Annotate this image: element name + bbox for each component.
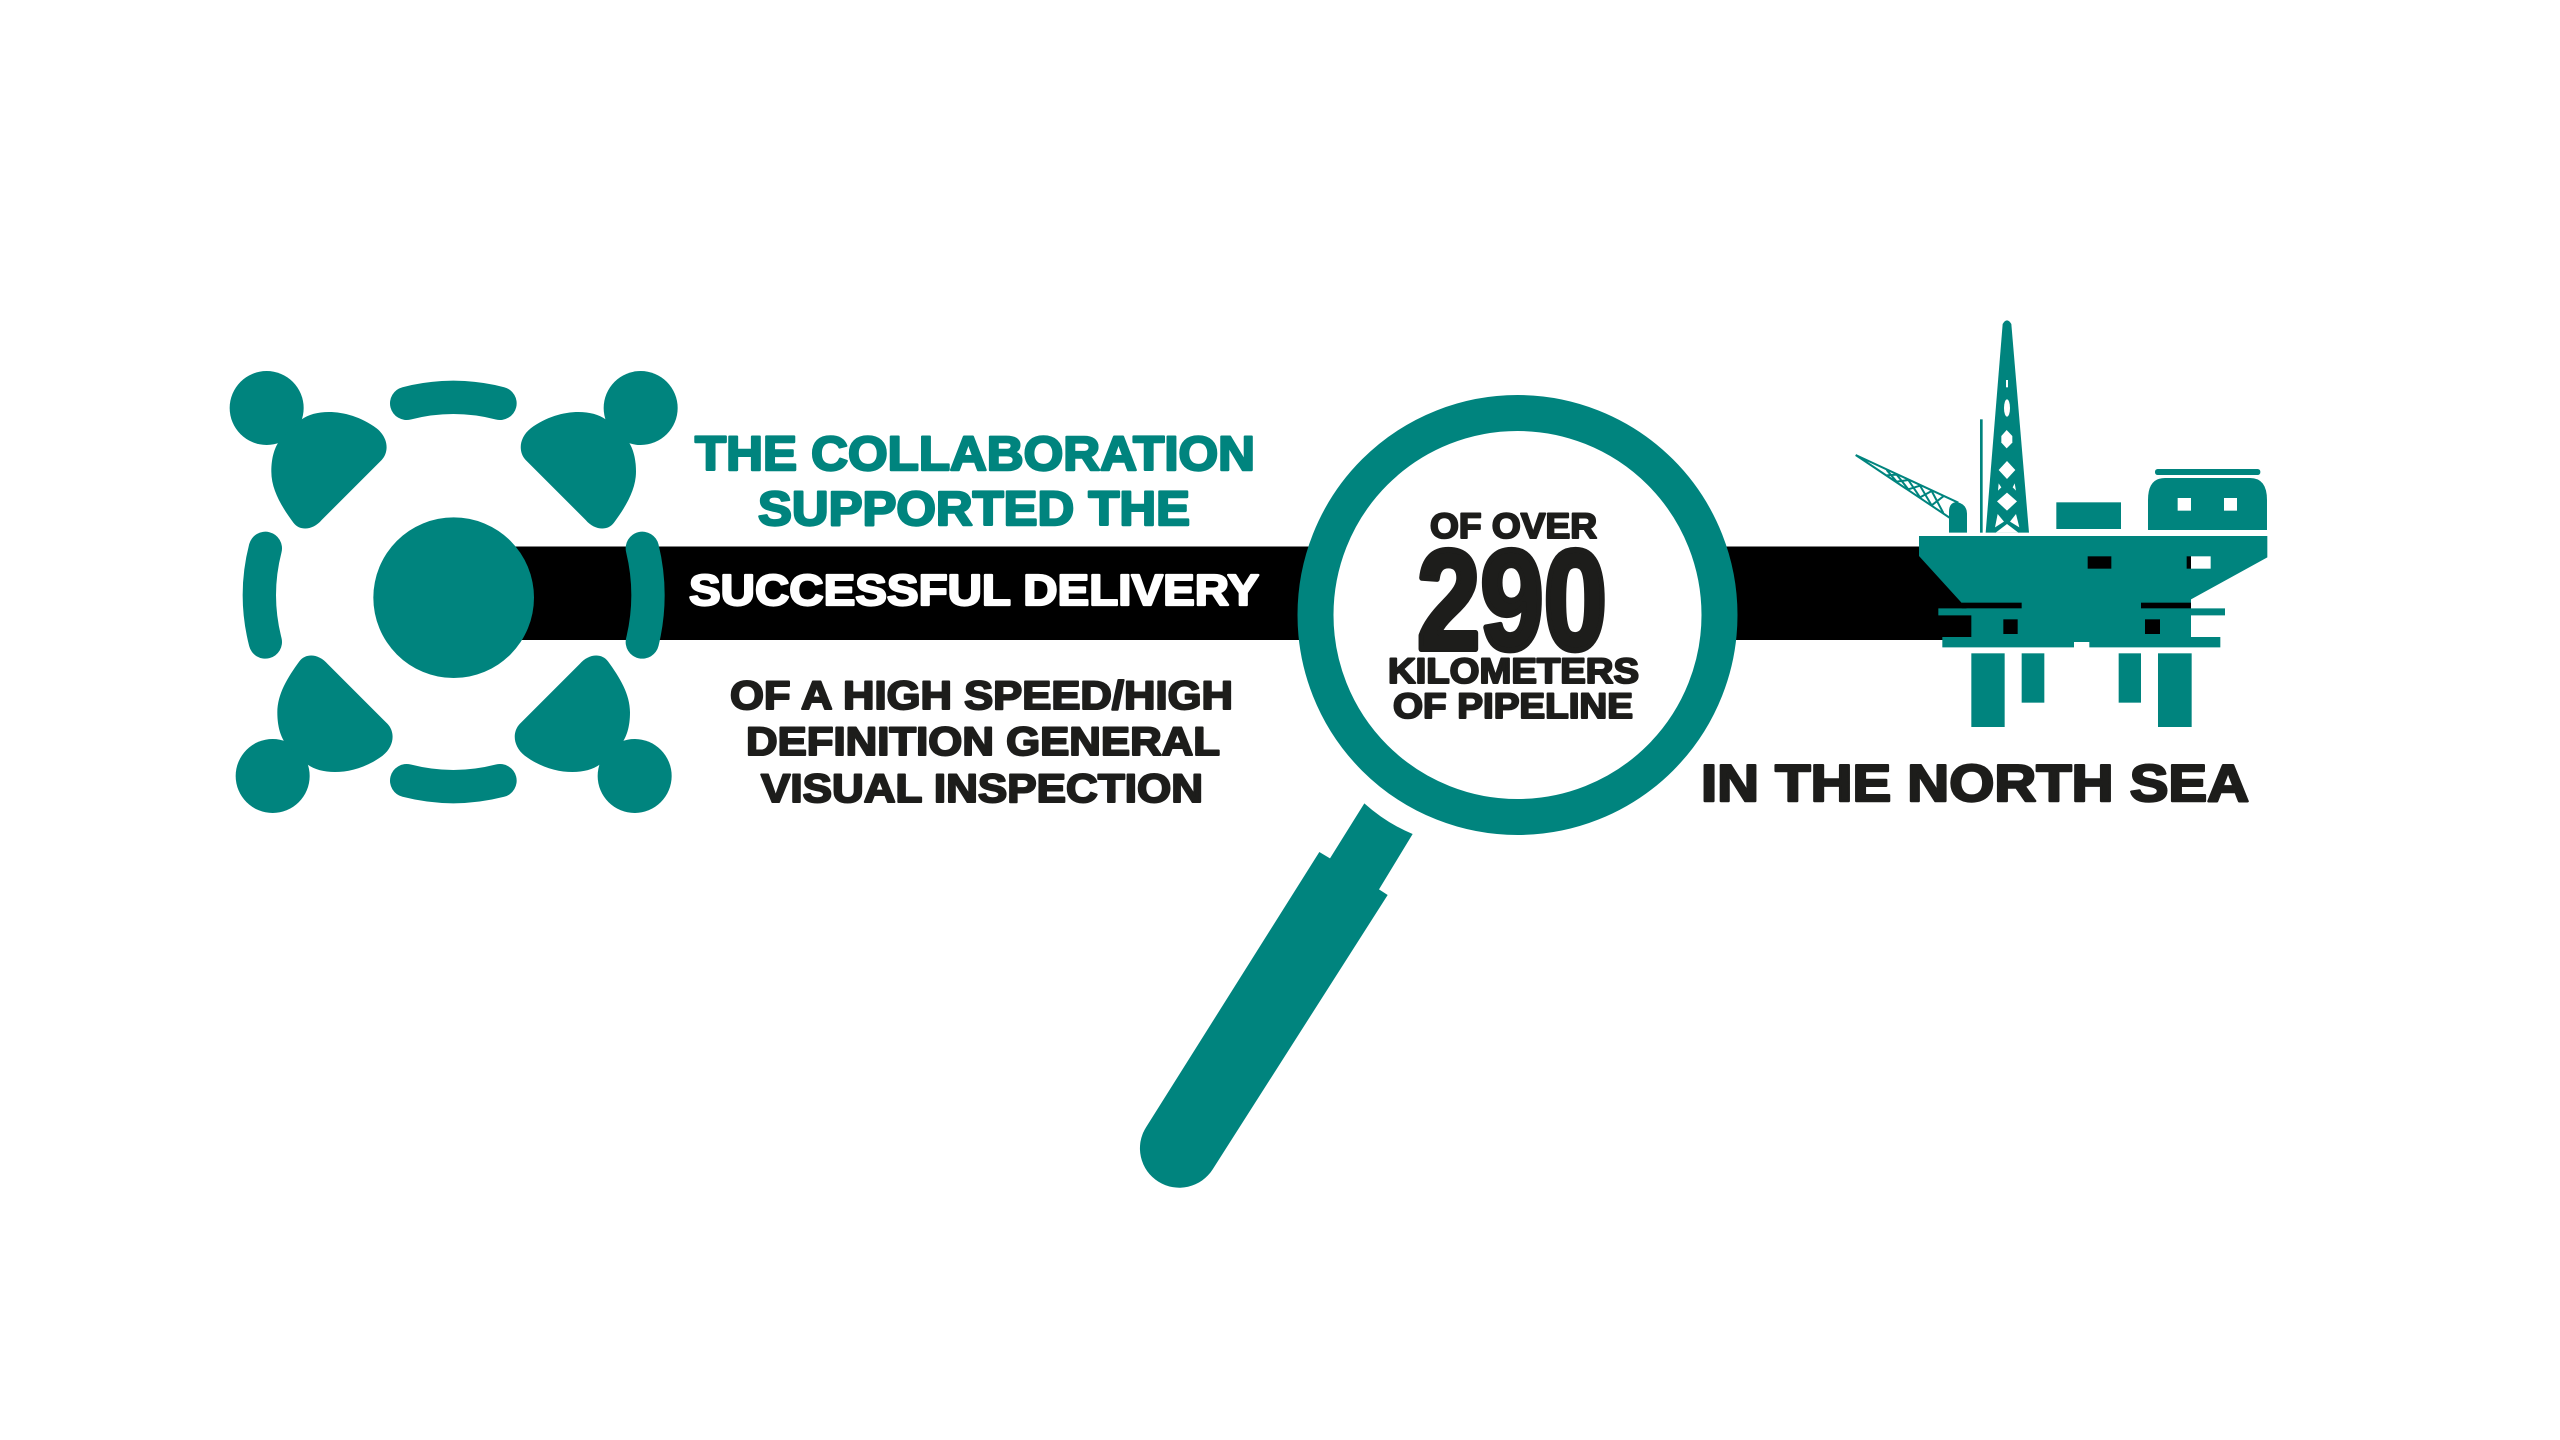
vent pole — [1980, 419, 1983, 533]
person bottom left — [236, 655, 393, 813]
hull openings — [1962, 556, 2211, 634]
icon: people around a table — [230, 371, 678, 813]
callout: 290 kilometers of pipeline — [1388, 507, 1639, 726]
person top left — [230, 371, 387, 529]
heading: the collaboration: SUPPORTED THE — [758, 483, 1190, 536]
text: inspection description — [730, 674, 1233, 811]
icon: magnifying glass — [1140, 413, 1720, 1188]
callout: 290 kilometers of pipeline: OF OVER — [1430, 507, 1597, 546]
callout: 290 kilometers of pipeline: OF PIPELINE — [1393, 687, 1633, 726]
crane — [1856, 455, 1967, 533]
storage block — [2056, 502, 2121, 529]
callout: 290 kilometers of pipeline: KILOMETERS — [1388, 652, 1639, 691]
table — [373, 517, 534, 678]
callout: 290 kilometers of pipeline: 290 — [1417, 521, 1607, 680]
derrick tower — [1986, 320, 2029, 533]
text: successful delivery: SUCCESSFUL DELIVERY — [689, 566, 1259, 615]
person bottom right — [515, 655, 672, 813]
person top right — [521, 371, 678, 529]
icon: offshore oil rig — [1856, 320, 2267, 727]
heading: the collaboration — [695, 428, 1255, 536]
text: in the north sea: IN THE NORTH SEA — [1701, 755, 2249, 813]
text: inspection description: VISUAL INSPECTION — [761, 767, 1203, 811]
text: inspection description: DEFINITION GENERAL — [746, 720, 1220, 764]
rig legs — [1971, 653, 2192, 727]
seat arcs — [259, 397, 648, 787]
handle — [1140, 803, 1413, 1188]
lens — [1316, 413, 1720, 817]
black pipeline bar — [500, 546, 2000, 640]
text: inspection description: OF A HIGH SPEED/HIGH — [730, 674, 1233, 718]
hull and decks — [1919, 536, 2267, 647]
heading: the collaboration: THE COLLABORATION — [695, 428, 1255, 481]
accommodation module — [2148, 469, 2267, 530]
